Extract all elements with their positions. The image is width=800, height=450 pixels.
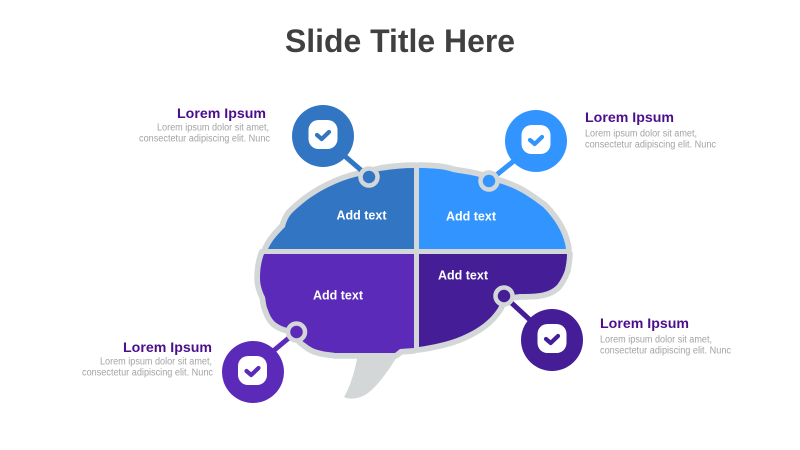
speech bubble tail	[344, 349, 402, 399]
icon: bottom left check badge	[222, 341, 284, 403]
text block: top left	[139, 105, 270, 144]
panel: top right lobe	[419, 168, 566, 249]
title: Slide Title Here	[285, 23, 515, 59]
node: bottom left	[288, 324, 305, 340]
text block: top right: Lorem Ipsum	[585, 109, 674, 125]
text block: top right	[585, 109, 716, 150]
text block: bottom right: consectetur adipiscing elit. Nunc	[600, 346, 731, 356]
node: bottom right	[496, 288, 512, 304]
panel: top left lobe: Add text	[336, 208, 387, 222]
text block: bottom left: Lorem Ipsum	[123, 339, 212, 355]
panel: bottom right lobe: Add text	[438, 268, 489, 282]
text block: top right: consectetur adipiscing elit. Nunc	[585, 140, 716, 150]
icon: top left check badge	[292, 105, 354, 167]
text block: bottom left: Lorem ipsum dolor sit amet,	[100, 356, 212, 368]
text block: top right: Lorem ipsum dolor sit amet,	[585, 128, 697, 140]
panel: top left lobe	[268, 168, 414, 249]
panel: top right lobe: Add text	[446, 210, 497, 224]
text block: top left: consectetur adipiscing elit. Nunc	[139, 134, 270, 144]
icon: bottom right check badge	[521, 309, 583, 371]
node: top left	[360, 168, 378, 186]
panel: bottom right lobe	[419, 254, 567, 347]
node: top right	[480, 172, 498, 190]
connector: top right	[489, 160, 515, 181]
panel: bottom left lobe	[260, 254, 414, 353]
panel: bottom left lobe: Add text	[313, 288, 364, 302]
text block: bottom left: consectetur adipiscing elit. Nunc	[82, 368, 213, 378]
text block: bottom right: Lorem ipsum dolor sit amet,	[600, 334, 712, 346]
text block: top left: Lorem ipsum dolor sit amet,	[157, 122, 269, 134]
text block: top left: Lorem Ipsum	[177, 105, 266, 121]
connector: bottom right	[504, 296, 530, 320]
text block: bottom right	[600, 315, 731, 356]
brain speech bubble outline	[260, 168, 567, 353]
text block: bottom right: Lorem Ipsum	[600, 315, 689, 331]
connector: top left	[340, 152, 369, 177]
text block: bottom left	[82, 339, 213, 378]
connector: bottom left	[272, 332, 296, 352]
icon: top right check badge	[505, 110, 567, 172]
